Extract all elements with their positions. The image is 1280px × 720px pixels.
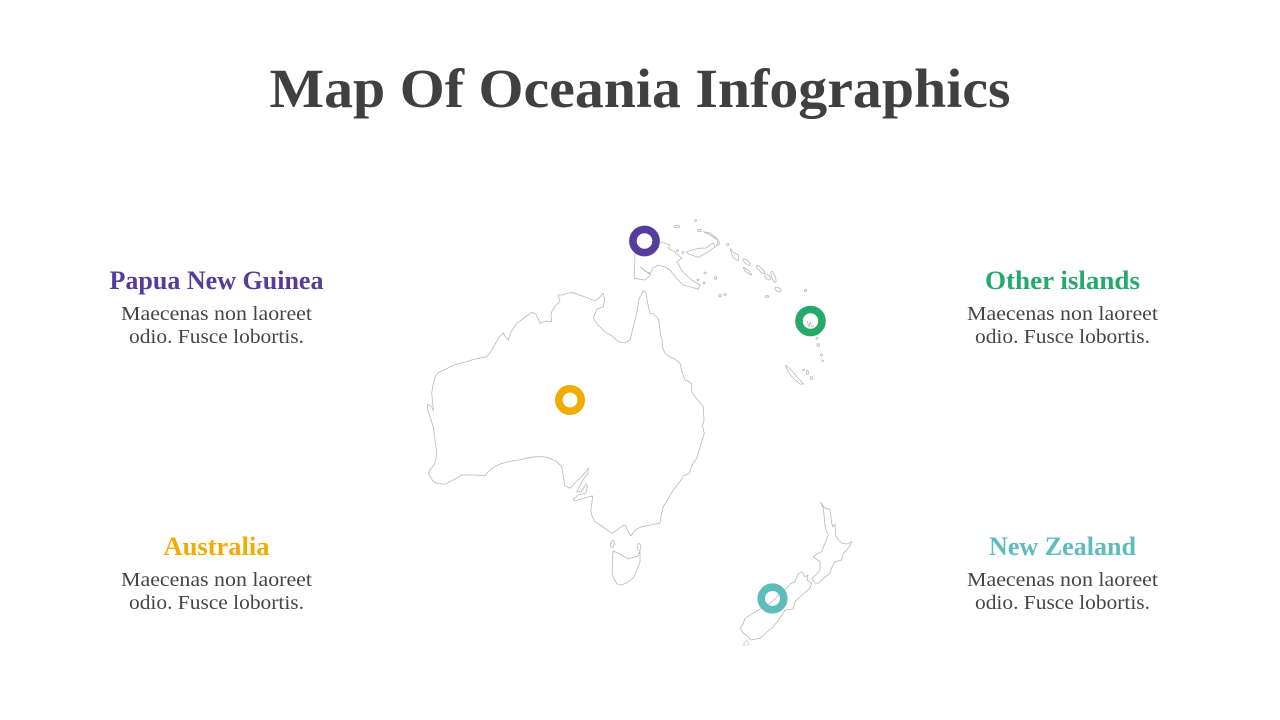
map: Papua New Guinea xyxy=(634,242,700,289)
text block: New Zealand: New Zealand xyxy=(989,532,1137,561)
marker: New Zealand xyxy=(761,587,784,610)
text block: Australia xyxy=(121,532,312,614)
marker: Other islands xyxy=(799,310,822,332)
title: Map Of Oceania Infographics xyxy=(270,58,1010,119)
text block: New Zealand xyxy=(967,532,1158,614)
text block: Other islands: Maecenas non laoreet xyxy=(967,303,1158,325)
text block: Papua New Guinea: Papua New Guinea xyxy=(110,266,324,295)
text block: Australia: odio. Fusce lobortis. xyxy=(129,592,304,614)
text block: Papua New Guinea: odio. Fusce lobortis. xyxy=(129,326,304,348)
text block: Other islands xyxy=(967,266,1158,348)
text block: Papua New Guinea: Maecenas non laoreet xyxy=(121,303,312,325)
map: Tasmania xyxy=(612,551,640,585)
map: New Zealand South Island xyxy=(740,572,812,640)
map: Vanuatu and New Caledonia xyxy=(786,321,824,384)
map: New Zealand North Island xyxy=(812,502,852,583)
text block: Australia: Australia xyxy=(164,532,270,561)
text block: Australia: Maecenas non laoreet xyxy=(121,569,312,591)
marker: Australia xyxy=(559,389,581,411)
text block: Papua New Guinea xyxy=(110,266,324,348)
map of Oceania xyxy=(427,220,852,645)
map: Stewart Island xyxy=(743,640,749,645)
marker: Papua New Guinea xyxy=(633,229,656,253)
text block: Other islands: Other islands xyxy=(985,266,1140,295)
text block: Other islands: odio. Fusce lobortis. xyxy=(975,326,1150,348)
text block: New Zealand: odio. Fusce lobortis. xyxy=(975,592,1150,614)
map: Australia xyxy=(427,291,704,536)
map: Solomon and nearby islands xyxy=(674,220,807,297)
text block: New Zealand: Maecenas non laoreet xyxy=(967,569,1158,591)
